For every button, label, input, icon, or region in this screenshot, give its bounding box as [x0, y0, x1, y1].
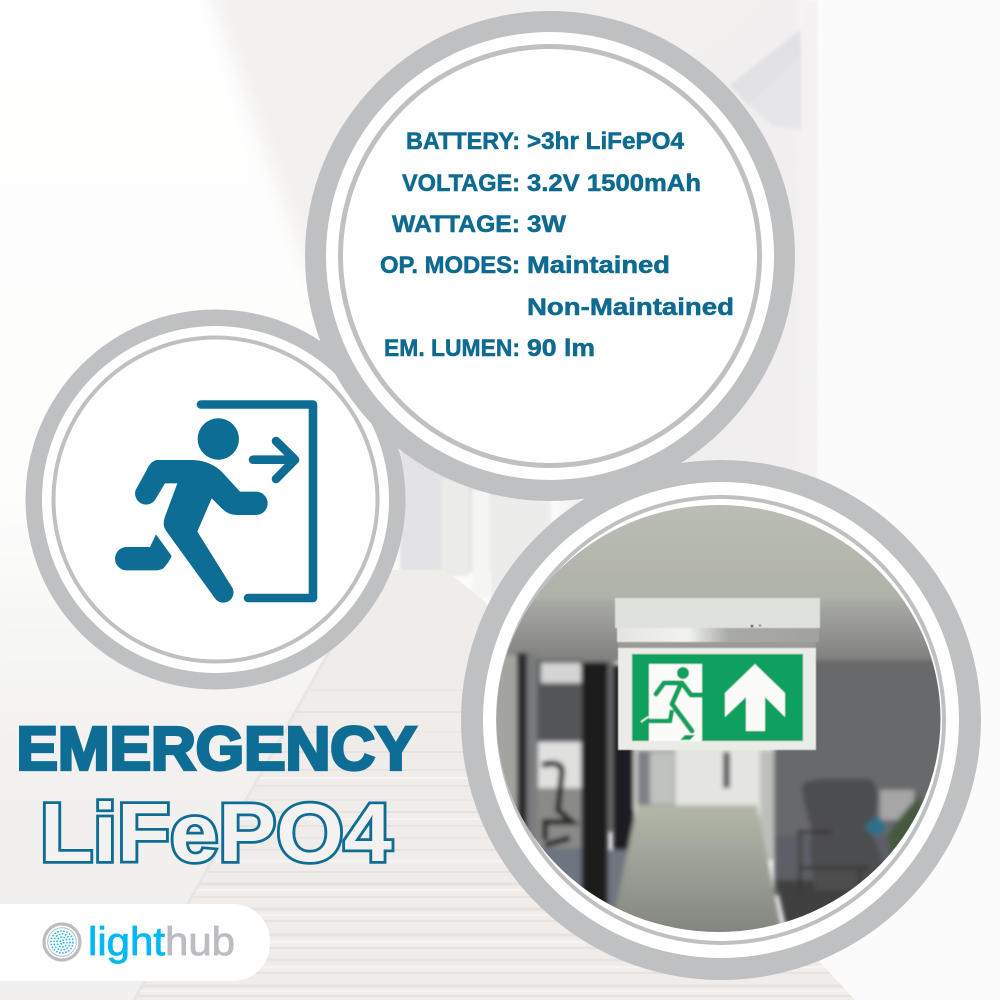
logo wordmark [88, 920, 235, 964]
logo: lighthub pill [0, 904, 270, 981]
spec row: voltage: VOLTAGE: [402, 170, 520, 197]
spec row: wattage: WATTAGE: [392, 211, 520, 238]
green exit pictogram [632, 654, 803, 741]
circle: exit icon panel [26, 310, 406, 690]
exit sign luminaire [615, 598, 820, 750]
circle: product photo panel [461, 460, 981, 980]
spec row: operating modes: Non-Maintained [527, 294, 734, 321]
icon: lighthub dotted lamp [44, 924, 80, 960]
icon: person running to exit door [115, 404, 313, 603]
spec row: operating modes: Maintained [527, 252, 670, 279]
spec row: battery: >3hr LiFePO4 [527, 128, 685, 155]
spec row: battery: BATTERY: [406, 128, 520, 155]
logo wordmark: hub [165, 920, 235, 964]
spec row: emergency lumen: EM. LUMEN: [384, 335, 520, 362]
logo wordmark: light [88, 920, 165, 964]
spec row: wattage: 3W [527, 211, 566, 238]
spec row: operating modes: OP. MODES: [380, 252, 520, 279]
spec row: emergency lumen [384, 335, 595, 362]
carpet floor [130, 565, 860, 1000]
spec row: operating modes [380, 252, 734, 321]
spec row: voltage: 3.2V 1500mAh [527, 170, 701, 197]
title: EMERGENCY: EMERGENCY [16, 714, 416, 782]
spec row: emergency lumen: 90 lm [527, 335, 595, 362]
circle: specifications panel [305, 11, 795, 501]
photo: exit sign in office interior [496, 505, 940, 932]
spec row: battery [406, 128, 685, 155]
spec row: voltage [402, 170, 701, 197]
subtitle: outlined LiFePO4: LiFePO4 [40, 786, 392, 879]
